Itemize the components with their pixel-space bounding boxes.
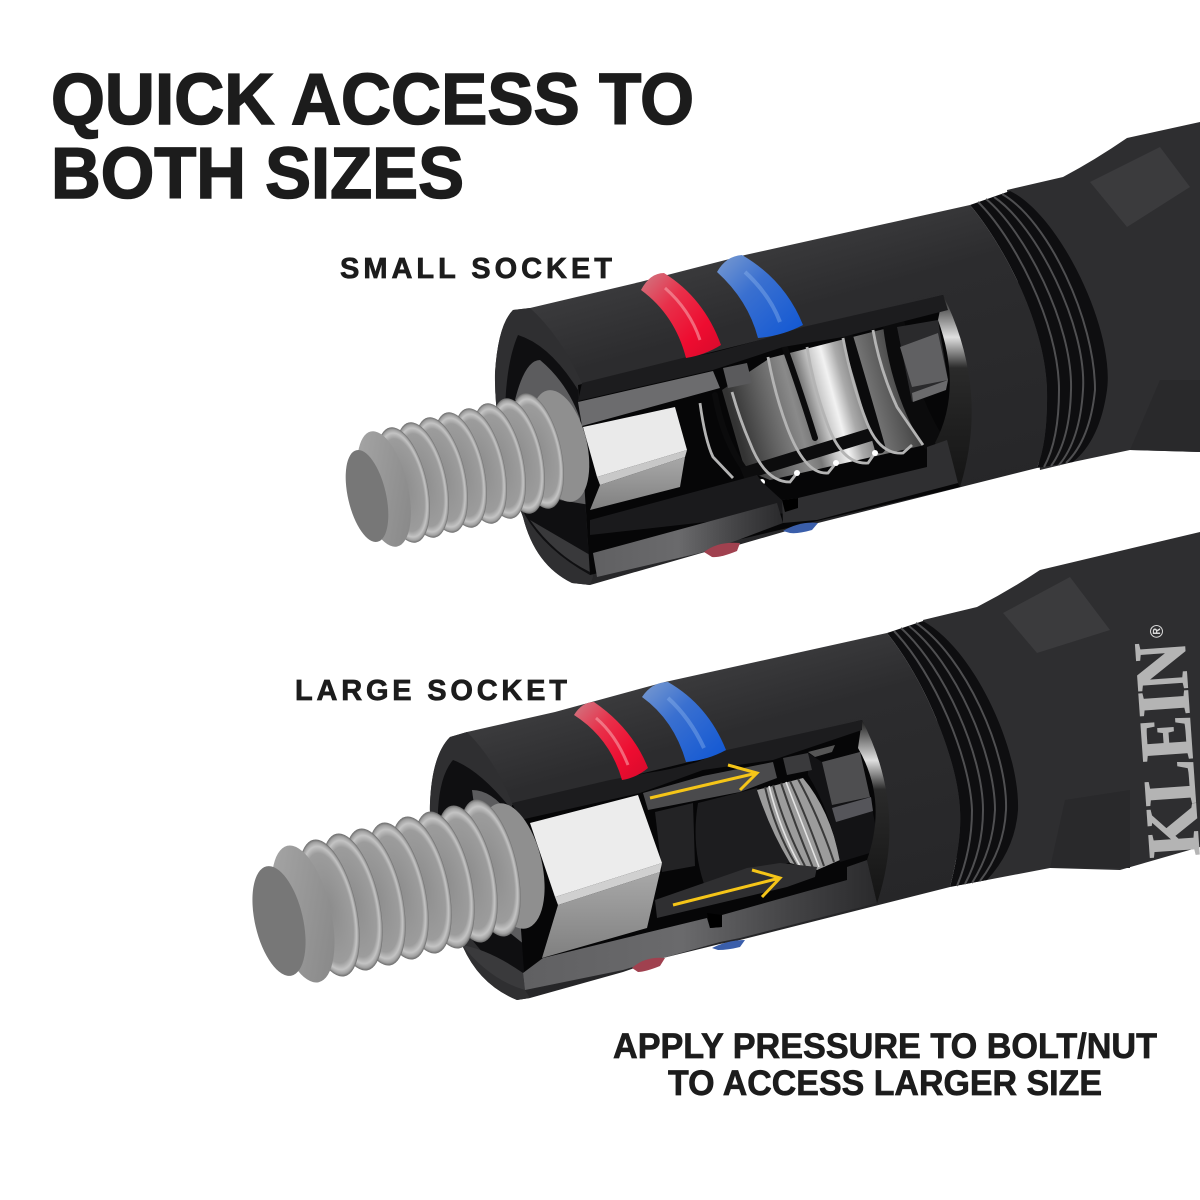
washer behind bolt [515, 360, 590, 505]
cap front face [495, 308, 593, 585]
inner dome [696, 788, 790, 895]
tool: small socket position [338, 122, 1200, 585]
caption: TO ACCESS LARGER SIZE [668, 1064, 1102, 1103]
socket body [495, 205, 1047, 585]
bolt [243, 794, 556, 989]
caption [613, 1027, 1157, 1103]
handle [923, 532, 1200, 885]
yellow arrow: upper [650, 765, 757, 798]
cap front face [430, 732, 530, 1000]
title [51, 60, 694, 214]
underside colour bands [632, 940, 745, 972]
bolt collar [468, 797, 556, 935]
lower slab [593, 503, 783, 577]
bolt chamfer [347, 426, 421, 552]
window ring [858, 720, 889, 903]
right lower slab [782, 440, 958, 523]
bolt threads [366, 388, 574, 548]
bolt tip face [338, 446, 396, 546]
inner shelf [590, 475, 795, 535]
registered mark: ® [1147, 625, 1167, 638]
bolt [338, 384, 599, 552]
lower jaw [530, 520, 590, 572]
socket body [430, 633, 960, 1000]
upper sleeve [643, 762, 777, 810]
notch [782, 498, 798, 512]
yellow arrow: lower [673, 870, 780, 905]
cap hole [505, 335, 590, 575]
spacer block [783, 753, 812, 775]
lower slab [523, 860, 877, 990]
shaded nut recess [655, 803, 695, 872]
washer behind bolt [472, 790, 547, 957]
bolt chamfer [260, 839, 346, 989]
inner rod [740, 428, 875, 480]
window interior [512, 720, 888, 985]
spring coils [700, 330, 923, 482]
window interior [578, 295, 969, 575]
blue band [642, 682, 726, 762]
hex nut [530, 795, 662, 958]
threaded collar [970, 191, 1108, 468]
underside colour bands [704, 523, 818, 557]
title: QUICK ACCESS TO [51, 60, 694, 140]
title: BOTH SIZES [51, 134, 464, 214]
threaded collar [887, 621, 1018, 887]
socket drive hex [897, 320, 948, 402]
upper lip [512, 720, 862, 820]
lower jaw [462, 945, 525, 990]
cylinder shadows [715, 325, 932, 470]
upper sleeve [578, 371, 720, 426]
bolt tip face [243, 861, 315, 981]
window ring [935, 295, 972, 487]
upper lip [578, 295, 948, 401]
lower sleeve [655, 863, 817, 918]
inner cylinder [722, 325, 925, 480]
label: large socket: LARGE SOCKET [295, 675, 567, 707]
label: small socket: SMALL SOCKET [340, 253, 612, 285]
bolt threads [287, 794, 532, 982]
socket drive hex [808, 745, 880, 862]
spring end dots [759, 450, 878, 485]
handle [1007, 122, 1200, 470]
notch [707, 913, 722, 928]
caption: APPLY PRESSURE TO BOLT/NUT [613, 1027, 1157, 1066]
red band [641, 273, 721, 358]
spacer block [723, 363, 752, 388]
blue band [717, 255, 803, 338]
red band [574, 702, 648, 780]
tool: large socket position [243, 532, 1200, 1000]
bolt collar [521, 384, 599, 508]
cap hole [438, 760, 526, 985]
compressed spring [757, 778, 840, 870]
hex nut [583, 407, 687, 510]
